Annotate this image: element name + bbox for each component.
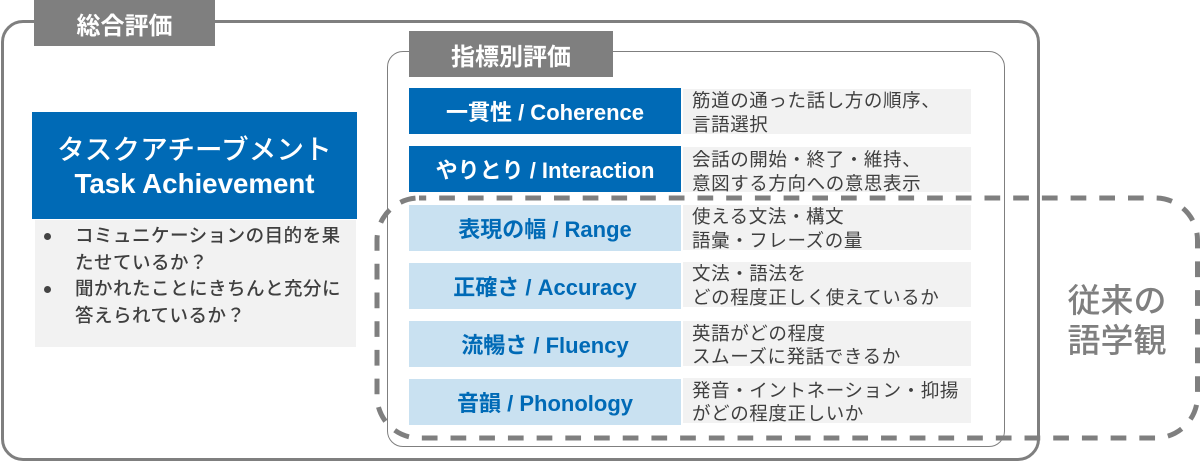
description: fluency <box>683 321 971 366</box>
heading: overall evaluation <box>34 0 215 46</box>
row: fluency: 流暢さ / Fluency <box>461 333 629 358</box>
description: coherence: 筋道の通った話し方の順序、 <box>692 90 940 111</box>
row: phonology: 音韻 / Phonology <box>457 391 633 416</box>
description: phonology: がどの程度正しいか <box>692 403 864 424</box>
label: traditional view of language <box>1068 282 1166 359</box>
bullet list: 答えられているか？ <box>75 304 245 326</box>
heading: overall evaluation: 総合評価 <box>76 12 172 40</box>
heading: indicator evaluation <box>409 31 613 77</box>
label: traditional view of language: 語学観 <box>1068 322 1166 359</box>
dashed frame: traditional view of language <box>374 196 1200 440</box>
bullet list: たせているか？ <box>75 252 208 272</box>
description: accuracy: 文法・語法を <box>692 263 807 284</box>
panel: task achievement heading <box>32 112 357 219</box>
row: phonology <box>409 379 681 425</box>
heading: indicator evaluation: 指標別評価 <box>451 44 571 70</box>
row: accuracy: 正確さ / Accuracy <box>453 275 637 300</box>
row: range: 表現の幅 / Range <box>458 217 632 242</box>
description: phonology <box>683 378 971 423</box>
panel: indicator evaluation frame <box>387 51 1005 447</box>
description: fluency: スムーズに発話できるか <box>692 346 901 367</box>
row: fluency <box>409 321 681 367</box>
row: accuracy <box>409 263 681 309</box>
panel: task achievement heading: Task Achievement <box>74 168 315 199</box>
bullet list <box>44 225 341 326</box>
panel: task achievement heading: タスクアチーブメント <box>57 134 332 165</box>
description: range: 使える文法・構文 <box>692 206 844 227</box>
label: traditional view of language: 従来の <box>1068 282 1166 319</box>
row: coherence: 一貫性 / Coherence <box>446 100 644 125</box>
description: interaction <box>683 147 971 192</box>
panel: task achievement questions <box>35 220 356 347</box>
description: coherence <box>683 89 971 134</box>
description: range <box>683 205 971 250</box>
description: phonology: 発音・イントネーション・抑揚 <box>692 380 959 400</box>
description: interaction: 意図する方向への意思表示 <box>692 172 921 194</box>
description: interaction: 会話の開始・終了・維持、 <box>692 149 921 170</box>
description: range: 語彙・フレーズの量 <box>692 230 863 250</box>
bullet list: コミュニケーションの目的を果 <box>75 225 341 246</box>
description: fluency: 英語がどの程度 <box>692 322 826 344</box>
description: accuracy: どの程度正しく使えているか <box>692 286 939 308</box>
row: coherence <box>409 88 681 134</box>
description: accuracy <box>683 262 971 307</box>
bullet list: 聞かれたことにきちんと充分に <box>75 278 341 299</box>
row: range <box>409 205 681 251</box>
row: interaction <box>409 146 681 192</box>
row: interaction: やりとり / Interaction <box>436 158 654 183</box>
description: coherence: 言語選択 <box>692 114 768 134</box>
